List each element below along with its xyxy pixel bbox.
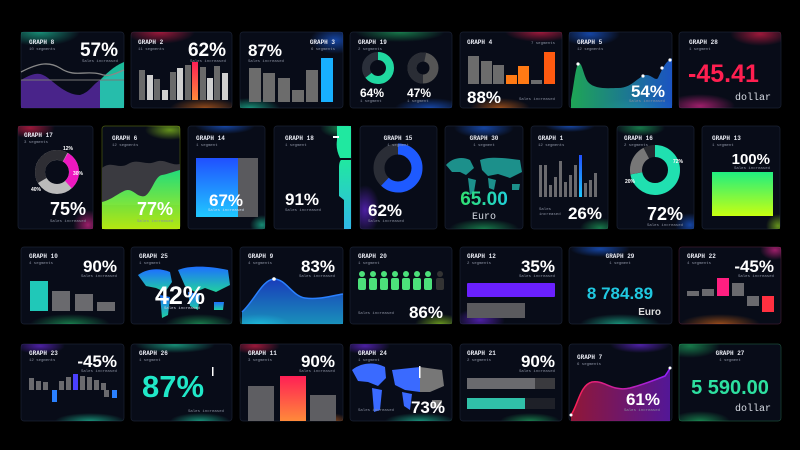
card: GRAPH 4 bar chart: Sales increased	[519, 97, 556, 102]
card: GRAPH 19 two donuts: 2 segments	[358, 48, 383, 52]
card: GRAPH 23 diverging bars: GRAPH 23	[29, 350, 58, 357]
card: GRAPH 6 area chart: Sales increased	[137, 219, 174, 224]
card: GRAPH 2 bar chart: 62%	[188, 40, 226, 61]
card: GRAPH 19 two donuts	[350, 22, 465, 118]
card: GRAPH 30 map value: Euro	[472, 212, 496, 223]
card: GRAPH 24 map: Sales increased	[358, 408, 395, 413]
card: GRAPH 16 donut: 2 segments	[624, 144, 649, 148]
card: GRAPH 5 area chart	[560, 22, 680, 118]
card: GRAPH 12 horizontal bars: GRAPH 12	[467, 253, 496, 260]
card: GRAPH 17 donut: 3 segments	[24, 141, 49, 145]
card: GRAPH 19 two donuts: 1 segment	[407, 100, 429, 104]
card: GRAPH 2 bar chart: Sales increased	[190, 59, 227, 64]
card: GRAPH 6 area chart: GRAPH 6	[112, 135, 138, 142]
card: GRAPH 20 people	[350, 247, 465, 334]
card: GRAPH 20 people: 86%	[409, 303, 443, 322]
card: GRAPH 5 area chart: 54%	[631, 82, 665, 101]
card: GRAPH 20 people: 1 segment	[358, 262, 380, 266]
card: GRAPH 24 map: 73%	[411, 398, 445, 417]
card: GRAPH 8 wave chart: 57%	[80, 40, 118, 61]
card: GRAPH 8 wave chart: GRAPH 8	[29, 39, 55, 46]
card: GRAPH 1 bar chart: 12 segments	[538, 144, 565, 148]
card: GRAPH 7 area chart: 61%	[626, 390, 660, 409]
card: GRAPH 22 waterfall: 4 segments	[687, 262, 712, 266]
card: GRAPH 8 wave chart: Sales increased	[82, 59, 119, 64]
card: GRAPH 12 horizontal bars: 35%	[521, 257, 555, 276]
card: GRAPH 29 value: GRAPH 29	[606, 253, 635, 260]
card: GRAPH 26 big value: 87%	[142, 369, 204, 404]
card: GRAPH 10 bars	[21, 247, 124, 334]
card: GRAPH 1 bar chart: Sales	[539, 207, 552, 212]
card: GRAPH 28 value: GRAPH 28	[689, 39, 718, 46]
card: GRAPH 2 bar chart: 11 segments	[138, 48, 165, 52]
card: GRAPH 14 stacked bar	[188, 118, 274, 235]
card: GRAPH 15 donut: 62%	[368, 201, 402, 220]
card: GRAPH 27 value: GRAPH 27	[716, 350, 745, 357]
card: GRAPH 18 person	[274, 118, 360, 229]
card: GRAPH 27 value: dollar	[735, 403, 771, 415]
card: GRAPH 7 area chart: Sales increased	[624, 408, 661, 413]
card: GRAPH 26 big value: Sales increased	[188, 409, 225, 414]
card: GRAPH 19 two donuts: GRAPH 19	[358, 39, 387, 46]
card: GRAPH 25 map: 42%	[155, 282, 205, 310]
card: GRAPH 30 map value: GRAPH 30	[470, 135, 499, 142]
card: GRAPH 9 bell curve	[230, 247, 343, 334]
card: GRAPH 3 bar chart: 6 segments	[311, 48, 336, 52]
card: GRAPH 7 area chart: 6 segments	[577, 363, 602, 367]
card: GRAPH 6 area chart	[102, 120, 195, 229]
card: GRAPH 25 map: Sales increased	[164, 306, 201, 311]
card: GRAPH 19 two donuts: 1 segment	[360, 100, 382, 104]
card: GRAPH 16 donut: 20%	[625, 179, 636, 185]
card: GRAPH 13 full block	[702, 126, 790, 238]
card: GRAPH 18 person: GRAPH 18	[285, 135, 314, 142]
card: GRAPH 27 value: 1 segment	[719, 359, 741, 363]
card: GRAPH 9 bell curve: GRAPH 9	[248, 253, 274, 260]
card: GRAPH 26 big value	[131, 337, 232, 429]
card: GRAPH 14 stacked bar: 67%	[209, 191, 243, 210]
card: GRAPH 14 stacked bar: 1 segment	[196, 144, 218, 148]
card: GRAPH 10 bars: Sales increased	[81, 274, 118, 279]
card: GRAPH 30 map value	[445, 118, 523, 239]
card: GRAPH 3 bar chart: GRAPH 3	[310, 39, 335, 46]
card: GRAPH 25 map	[131, 247, 235, 334]
card: GRAPH 5 area chart: GRAPH 5	[577, 39, 603, 46]
card: GRAPH 16 donut: 72%	[673, 159, 684, 165]
card: GRAPH 14 stacked bar: GRAPH 14	[196, 135, 225, 142]
card: GRAPH 21 people rows: Sales increased	[519, 369, 556, 374]
card: GRAPH 5 area chart: Sales increased	[629, 99, 666, 104]
card: GRAPH 3 bar chart: 87%	[248, 41, 282, 60]
card: GRAPH 21 people rows	[460, 344, 562, 429]
card: GRAPH 19 two donuts: 64%	[360, 86, 384, 100]
card: GRAPH 8 wave chart	[0, 18, 124, 108]
card: GRAPH 8 wave chart: 10 segments	[29, 48, 56, 52]
card: GRAPH 28 value: -45.41	[688, 60, 759, 88]
card: GRAPH 12 horizontal bars: Sales increased	[519, 274, 556, 279]
card: GRAPH 27 value: 5 590.00	[691, 377, 769, 399]
card: GRAPH 2 bar chart	[125, 20, 240, 118]
card: GRAPH 1 bar chart	[531, 120, 620, 238]
card: GRAPH 4 bar chart	[460, 22, 575, 118]
card: GRAPH 5 area chart: 12 segments	[577, 48, 604, 52]
card: GRAPH 25 map: 1 segment	[139, 262, 161, 266]
card: GRAPH 23 diverging bars: Sales increased	[81, 369, 118, 374]
card: GRAPH 17 donut: 30%	[73, 171, 84, 177]
card: GRAPH 17 donut: 75%	[50, 199, 86, 219]
card: GRAPH 11 bars: GRAPH 11	[248, 350, 277, 357]
card: GRAPH 11 bars: Sales increased	[299, 369, 336, 374]
card: GRAPH 18 person: 91%	[285, 190, 319, 209]
card: GRAPH 28 value	[665, 22, 790, 118]
card: GRAPH 10 bars: 4 segments	[29, 262, 54, 266]
card: GRAPH 10 bars: GRAPH 10	[29, 253, 58, 260]
card: GRAPH 12 horizontal bars: 2 segments	[467, 262, 492, 266]
card: GRAPH 17 donut	[5, 118, 103, 240]
card: GRAPH 29 value: Euro	[638, 307, 661, 318]
card: GRAPH 3 bar chart: Sales increased	[248, 59, 285, 64]
card: GRAPH 19 two donuts: 47%	[407, 86, 431, 100]
card: GRAPH 23 diverging bars: 12 segments	[29, 359, 56, 363]
card: GRAPH 13 full block: GRAPH 13	[712, 135, 741, 142]
card: GRAPH 17 donut: 40%	[31, 187, 42, 193]
card: GRAPH 30 map value: 1 segment	[473, 144, 495, 148]
card: GRAPH 20 people: GRAPH 20	[358, 253, 387, 260]
card: GRAPH 26 big value: 1 segment	[139, 359, 161, 363]
card: GRAPH 16 donut: GRAPH 16	[624, 135, 653, 142]
card: GRAPH 18 person: 1 segment	[285, 144, 307, 148]
card: GRAPH 13 full block: 100%	[732, 151, 770, 168]
card: GRAPH 14 stacked bar: Sales increased	[208, 208, 245, 213]
card: GRAPH 21 people rows: 2 segments	[467, 359, 492, 363]
card: GRAPH 15 donut: GRAPH 15	[384, 135, 413, 142]
card: GRAPH 25 map: GRAPH 25	[139, 253, 168, 260]
card: GRAPH 17 donut: GRAPH 17	[24, 132, 53, 139]
card: GRAPH 29 value: 8 784.89	[587, 284, 653, 303]
card: GRAPH 24 map	[340, 338, 455, 429]
card: GRAPH 1 bar chart: GRAPH 1	[538, 135, 564, 142]
card: GRAPH 23 diverging bars: -45%	[77, 352, 117, 371]
card: GRAPH 1 bar chart: increased	[539, 212, 561, 217]
card: GRAPH 6 area chart: 77%	[137, 199, 173, 219]
card: GRAPH 23 diverging bars	[15, 338, 125, 429]
card: GRAPH 13 full block: Sales increased	[734, 166, 771, 171]
card: GRAPH 22 waterfall: GRAPH 22	[687, 253, 716, 260]
card: GRAPH 7 area chart	[569, 337, 672, 421]
card: GRAPH 22 waterfall: -45%	[734, 257, 774, 276]
card: GRAPH 21 people rows: GRAPH 21	[467, 350, 496, 357]
card: GRAPH 6 area chart: 12 segments	[112, 144, 139, 148]
card: GRAPH 26 big value: GRAPH 26	[139, 350, 168, 357]
card: GRAPH 11 bars	[230, 338, 350, 429]
card: GRAPH 17 donut: Sales increased	[50, 219, 87, 224]
card: GRAPH 11 bars: 3 segments	[248, 359, 273, 363]
card: GRAPH 28 value: dollar	[735, 92, 771, 104]
card: GRAPH 21 people rows: 90%	[521, 352, 555, 371]
card: GRAPH 13 full block: 1 segment	[712, 144, 734, 148]
card: GRAPH 20 people: Sales increased	[358, 311, 395, 316]
card: GRAPH 4 bar chart: 88%	[467, 88, 501, 107]
card: GRAPH 22 waterfall	[679, 240, 790, 334]
card: GRAPH 7 area chart: GRAPH 7	[577, 354, 603, 361]
card: GRAPH 24 map: 1 segment	[358, 359, 380, 363]
card: GRAPH 16 donut: Sales increased	[647, 223, 684, 228]
card: GRAPH 4 bar chart: GRAPH 4	[467, 39, 493, 46]
card: GRAPH 11 bars: 90%	[301, 352, 335, 371]
card: GRAPH 28 value: 1 segment	[689, 48, 711, 52]
card: GRAPH 22 waterfall: Sales increased	[738, 274, 775, 279]
card: GRAPH 17 donut: 12%	[63, 146, 74, 152]
card: GRAPH 16 donut: 72%	[647, 204, 683, 224]
card: GRAPH 9 bell curve: 83%	[301, 257, 335, 276]
card: GRAPH 29 value	[569, 241, 672, 334]
card: GRAPH 30 map value: 65.00	[460, 189, 508, 210]
card: GRAPH 24 map: GRAPH 24	[358, 350, 387, 357]
card: GRAPH 29 value: 1 segment	[609, 262, 631, 266]
card: GRAPH 10 bars: 90%	[83, 257, 117, 276]
card: GRAPH 15 donut	[350, 126, 437, 235]
card: GRAPH 4 bar chart: 7 segments	[531, 42, 556, 46]
card: GRAPH 15 donut: 1 segment	[387, 144, 409, 148]
card: GRAPH 12 horizontal bars	[455, 247, 562, 332]
card: GRAPH 9 bell curve: 4 segments	[248, 262, 273, 266]
card: GRAPH 16 donut	[615, 120, 705, 237]
card: GRAPH 2 bar chart: GRAPH 2	[138, 39, 164, 46]
card: GRAPH 9 bell curve: Sales increased	[299, 274, 336, 279]
card: GRAPH 18 person: Sales increased	[285, 208, 322, 213]
card: GRAPH 1 bar chart: 26%	[568, 204, 602, 223]
card: GRAPH 27 value	[660, 334, 781, 431]
card: GRAPH 15 donut: Sales increased	[368, 219, 405, 224]
card: GRAPH 3 bar chart	[220, 26, 360, 118]
